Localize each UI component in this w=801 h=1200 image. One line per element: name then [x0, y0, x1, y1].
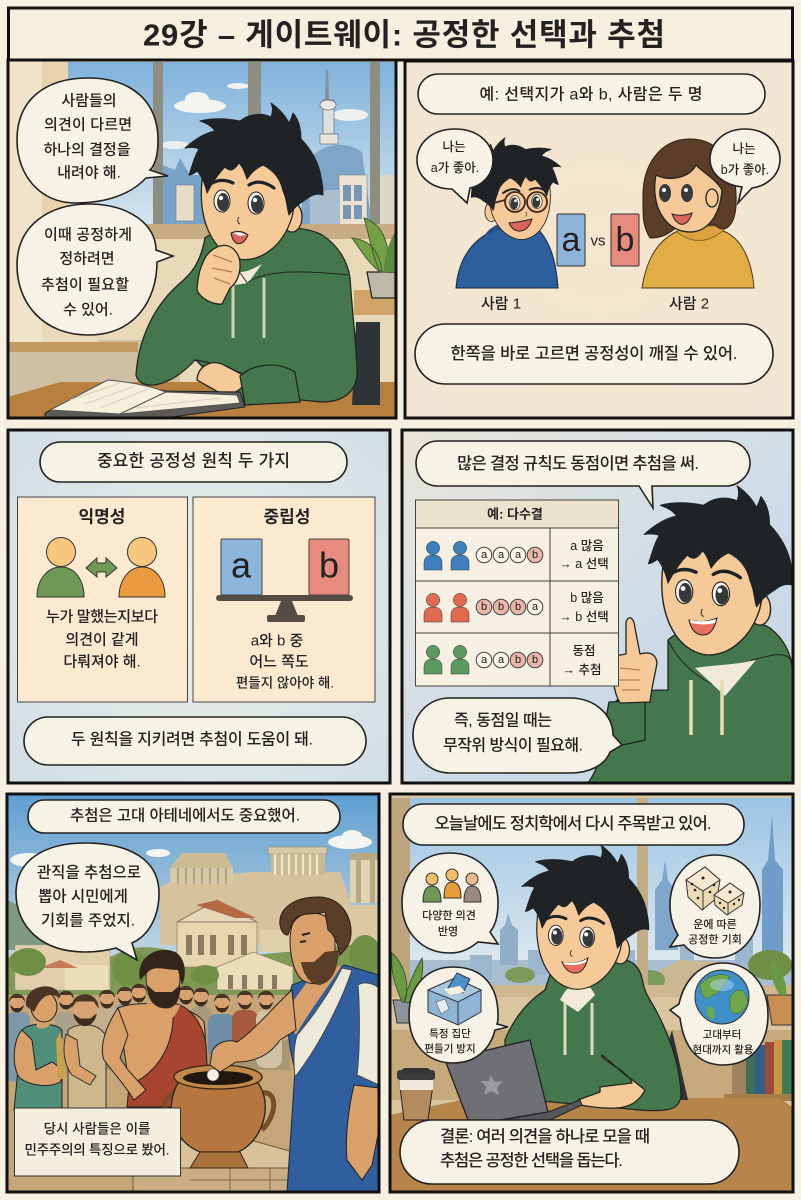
acropolis hill and temples	[7, 847, 381, 995]
speech: a	[417, 129, 493, 203]
speech bubble: officials chosen by lot	[16, 843, 159, 960]
panel: ancient Athens	[6, 794, 381, 1192]
city skyline	[392, 798, 793, 997]
card: anonymity: 누가 말했는지보다	[46, 608, 158, 626]
citizen in red toga	[102, 950, 207, 1107]
row b wins: b 많음	[570, 591, 604, 605]
majority table	[415, 500, 618, 686]
potted plant	[352, 218, 396, 298]
panel: disagreement needs a decision	[8, 60, 396, 418]
classical buildings	[176, 919, 258, 968]
option cards a vs b: b	[616, 221, 634, 259]
row b wins: b	[498, 601, 504, 613]
row a wins: → a 선택	[559, 557, 609, 571]
open book	[45, 380, 245, 418]
window with Seoul skyline	[68, 62, 396, 239]
icon: globe	[695, 970, 749, 1024]
speech: b: 나는	[732, 142, 756, 156]
speech bubble: officials chosen by lot: 관직을 추첨으로	[37, 864, 141, 882]
speech bubble: ties use lottery	[416, 441, 750, 508]
row b wins: → b 선택	[559, 610, 609, 624]
bottom pill	[24, 717, 366, 765]
speech bubble: randomness	[413, 698, 622, 773]
speech bubble: ties use lottery: 많은 결정 규칙도 동점이면 추첨을 써.	[457, 454, 699, 473]
top pill: 오늘날에도 정치학에서 다시 주목받고 있어.	[434, 814, 712, 833]
card: neutrality	[193, 497, 375, 702]
card: anonymity: 의견이 같게	[65, 632, 139, 648]
icon: ballot box	[428, 973, 481, 1025]
man in blue toga dropping ball	[210, 897, 379, 1192]
panel: majority rule ties	[402, 430, 793, 783]
row a wins: a 많음	[570, 539, 604, 553]
speech: b	[710, 129, 780, 203]
caption box: 당시 사람들은 이를	[44, 1122, 150, 1136]
bubble: from ancient to modern: 고대부터	[703, 1029, 741, 1041]
bubble: prevents favoring groups	[409, 967, 508, 1063]
desk	[390, 1098, 793, 1192]
bottom pill	[415, 324, 773, 384]
panel: today in political science	[390, 794, 793, 1192]
row tie: b	[515, 654, 521, 666]
bubble: diverse opinions	[402, 853, 498, 953]
boy with laptop	[505, 845, 688, 1111]
bubble: chance: 운에 따른	[693, 918, 737, 931]
row a wins: a	[481, 549, 488, 561]
bubble: conclusion: 추첨은 공정한 선택을 돕는다.	[440, 1151, 623, 1170]
right plant	[767, 960, 793, 1025]
card: neutrality: 어느 쪽도	[249, 654, 309, 670]
option cards a vs b: vs	[590, 232, 606, 250]
speech: b: b가 좋아.	[721, 163, 769, 177]
panel: two fairness principles	[8, 430, 390, 783]
row a wins: a	[498, 549, 505, 561]
speech bubble: decision: 하나의 결정을	[44, 142, 131, 158]
speech bubble: lottery: 수 있어.	[63, 302, 113, 318]
speech bubble: lottery: 정하려면	[59, 250, 115, 268]
chair	[352, 322, 380, 405]
card: anonymity: 다뤄져야 해.	[63, 654, 141, 670]
icon: balance with a and b: a	[231, 544, 252, 586]
crowd	[6, 984, 290, 1082]
row a wins: b	[532, 549, 538, 561]
row b wins: a	[532, 601, 539, 613]
speech bubble: officials chosen by lot: 뽑아 시민에게	[38, 888, 128, 906]
bubble: conclusion: 결론: 여러 의견을 하나로 모을 때	[440, 1127, 650, 1146]
laptop	[445, 1040, 582, 1125]
heading pill: 중요한 공정성 원칙 두 가지	[97, 452, 290, 470]
icon: two people swapped	[37, 538, 165, 597]
speech bubble: lottery	[17, 204, 173, 335]
row tie: → 추첨	[563, 663, 601, 677]
bubble: diverse opinions: 반영	[438, 925, 458, 938]
bubble: chance	[670, 855, 760, 958]
desk	[8, 382, 396, 418]
speech: a: a가 좋아.	[431, 161, 479, 175]
title banner	[8, 8, 792, 60]
hand on chin	[197, 245, 240, 304]
coffee cup	[397, 1068, 435, 1120]
person 2	[642, 139, 754, 288]
header pill: 예: 선택지가 a와 b, 사람은 두 명	[480, 86, 702, 104]
speech bubble: lottery: 이때 공정하게	[44, 226, 132, 244]
panel: example with two people	[405, 61, 793, 418]
icon: three people	[423, 869, 481, 902]
icon: balance with a and b: b	[319, 544, 339, 586]
speech bubble: officials chosen by lot: 기회를 주었지.	[41, 912, 135, 930]
card: neutrality: a와 b 중	[251, 632, 304, 650]
row tie: 동점	[572, 644, 596, 658]
speech: a: 나는	[442, 140, 466, 154]
bottom pill: 두 원칙을 지키려면 추첨이 도움이 돼.	[71, 730, 313, 748]
bubble: conclusion	[400, 1120, 739, 1184]
caption box: 민주주의의 특징으로 봤어.	[24, 1142, 170, 1158]
option cards a vs b	[557, 214, 639, 266]
pedestal	[132, 1140, 290, 1190]
left plant	[392, 953, 423, 1023]
boy pointing up	[588, 486, 793, 783]
urn with ball	[165, 1065, 274, 1168]
young man at left	[14, 986, 66, 1110]
majority table: 예: 다수결	[487, 506, 543, 522]
label: person 2: 사람 2	[669, 296, 709, 312]
top pill	[28, 800, 340, 833]
title banner: 29강 – 게이트웨이: 공정한 선택과 추첨	[143, 18, 665, 52]
row b wins	[424, 591, 609, 624]
row a wins	[424, 539, 609, 571]
bubble: prevents favoring groups: 특정 집단	[429, 1028, 471, 1040]
hand on desk	[197, 363, 245, 394]
bubble: from ancient to modern	[670, 963, 768, 1065]
bubble: diverse opinions: 다양한 의견	[422, 909, 476, 922]
header pill	[418, 74, 765, 114]
card: neutrality: 편들지 않아야 해.	[236, 676, 334, 690]
row tie: a	[498, 654, 505, 666]
icon: dice	[686, 867, 744, 915]
row tie	[424, 644, 601, 677]
bubble: chance: 공정한 기회	[688, 933, 742, 946]
speech bubble: randomness: 무작위 방식이 필요해.	[443, 736, 583, 754]
heading pill	[40, 442, 347, 482]
speech bubble: decision: 내려야 해.	[57, 164, 121, 182]
bottom pill: 한쪽을 바로 고르면 공정성이 깨질 수 있어.	[450, 344, 738, 363]
option cards a vs b: a	[562, 221, 581, 259]
caption box	[14, 1108, 180, 1176]
person 1 with glasses	[456, 138, 561, 288]
bookshelf	[724, 1040, 793, 1101]
speech bubble: decision	[17, 78, 168, 203]
speech bubble: decision: 사람들의	[61, 92, 117, 110]
boy in green hoodie, hand on chin	[136, 103, 357, 405]
top pill	[403, 804, 744, 845]
top pill: 추첨은 고대 아테네에서도 중요했어.	[70, 806, 300, 824]
card: anonymity: 익명성	[79, 508, 125, 526]
icon: balance with a and b	[216, 539, 353, 622]
row b wins: b	[481, 601, 487, 613]
row tie: a	[481, 654, 488, 666]
card: anonymity	[18, 497, 188, 702]
speech bubble: randomness: 즉, 동점일 때는	[454, 712, 552, 730]
bubble: from ancient to modern: 현대까지 활용	[693, 1043, 754, 1056]
label: person 1: 사람 1	[481, 296, 521, 312]
row tie: b	[532, 654, 538, 666]
card: neutrality: 중립성	[264, 508, 310, 526]
row b wins: b	[515, 601, 521, 613]
speech bubble: lottery: 추첨이 필요할	[41, 276, 129, 294]
bearded man in tan tunic	[64, 994, 106, 1108]
speech bubble: decision: 의견이 다르면	[44, 116, 132, 134]
row a wins: a	[515, 549, 522, 561]
bubble: prevents favoring groups: 편들기 방지	[424, 1042, 476, 1055]
